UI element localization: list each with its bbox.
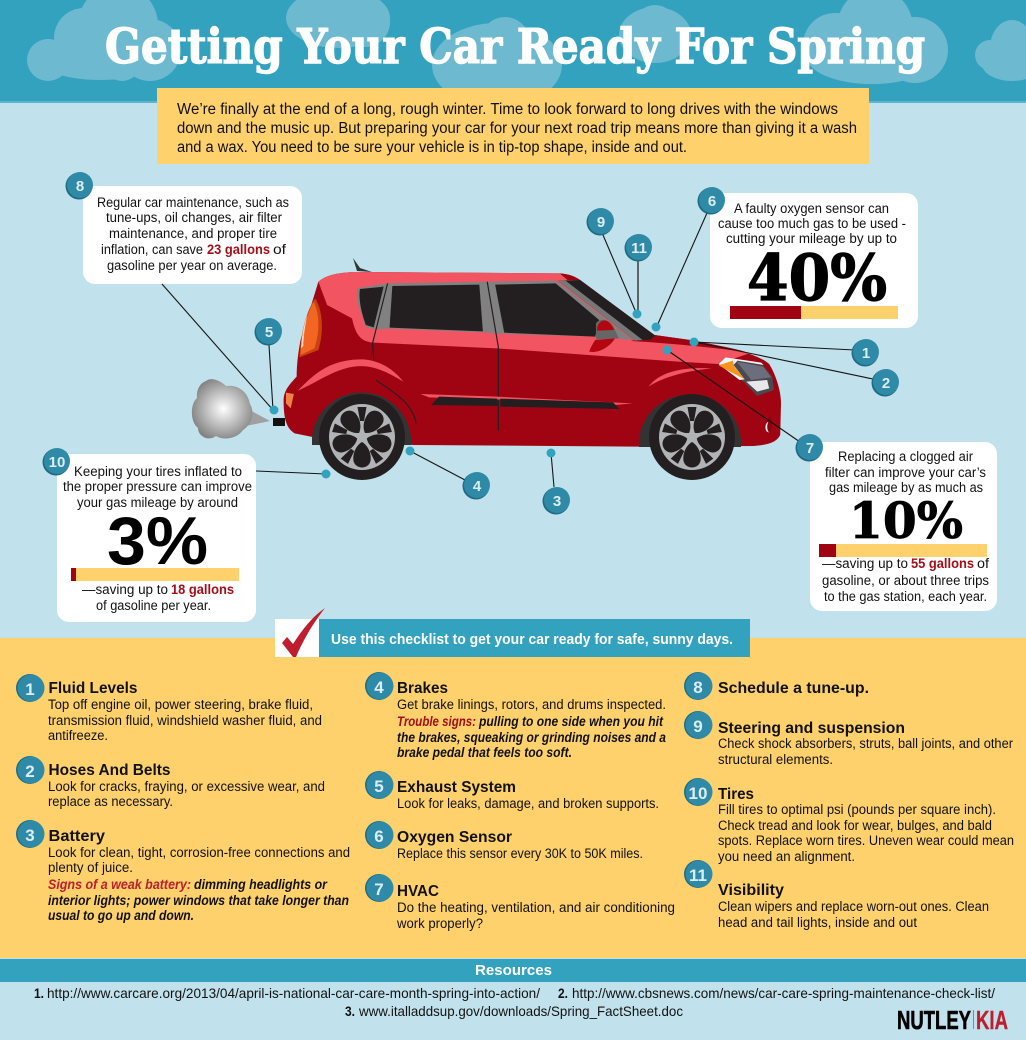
item 2: hoses and belts: replace as necessary. xyxy=(48,794,173,809)
resources band xyxy=(0,959,1026,982)
intro text box: and a wax. You need to be sure your vehicle is in tip-top shape, inside and out. xyxy=(177,139,687,156)
resources links: 2. xyxy=(558,985,568,1001)
callout: regular maintenance: 23 gallons xyxy=(207,242,270,257)
resources links: 3. xyxy=(345,1003,355,1019)
smoke cloud from exhaust xyxy=(192,379,270,438)
checklist panel background xyxy=(0,638,1026,958)
badge 2: 2 xyxy=(882,375,890,392)
badge 7: 7 xyxy=(806,440,814,457)
callout: oxygen sensor 40% xyxy=(710,193,918,328)
item 4: brakes: pulling to one side when you hit xyxy=(478,714,663,729)
item 10: tires: spots. Replace worn tires. Uneven wear could mean xyxy=(718,833,1014,848)
callout: regular maintenance: Regular car maintenance, such as xyxy=(97,195,289,210)
item 4: brakes: 4 xyxy=(374,678,384,697)
headlight xyxy=(719,357,774,396)
callout: tire pressure 3%: —saving up to xyxy=(82,582,168,597)
door seams xyxy=(373,282,498,431)
item 3: battery: interior lights; power windows that take longer than xyxy=(48,893,349,908)
checklist banner: Use this checklist to get your car ready for safe, sunny days. xyxy=(331,631,733,648)
callout: regular maintenance: tune-ups, oil changes, air filter xyxy=(106,210,282,225)
item 1: fluid levels: 1 xyxy=(25,680,35,699)
callout: air filter 10%: of xyxy=(977,556,989,571)
callout: air filter 10%: 55 gallons xyxy=(911,556,974,571)
callout: regular maintenance: inflation, can save xyxy=(101,242,203,257)
item 2: hoses and belts: Hoses And Belts xyxy=(48,762,170,779)
item 1: fluid levels: transmission fluid, windshield washer fluid, and xyxy=(48,713,322,728)
resources links: http://www.carcare.org/2013/04/april-is-national-car-care-month-spring-into-action/ xyxy=(47,985,540,1001)
item 3: battery: plenty of juice. xyxy=(48,860,133,875)
item 10: tires: Tires xyxy=(718,786,754,803)
badge 3 xyxy=(542,487,570,514)
item 9: steering and suspension: structural elements. xyxy=(718,752,833,767)
callout: air filter 10%: gas mileage by as much as xyxy=(829,480,983,495)
item 11: visibility: Visibility xyxy=(718,882,784,899)
title: Getting Your Car Ready For Spring xyxy=(105,19,925,75)
item 3: battery xyxy=(16,820,350,923)
badge 4: 4 xyxy=(473,478,482,495)
windshield xyxy=(558,280,655,341)
wheel arches xyxy=(312,392,741,447)
item 1: fluid levels: Fluid Levels xyxy=(48,680,138,697)
intro text box: down and the music up. But preparing your car for your next road trip means more than giving it a wash xyxy=(177,120,857,137)
item 5: exhaust system: Exhaust System xyxy=(397,779,516,796)
badge 10: 10 xyxy=(49,454,65,471)
side moulding xyxy=(420,394,633,405)
item 6: oxygen sensor: Oxygen Sensor xyxy=(397,829,512,846)
callout: air filter 10%: 10% xyxy=(849,491,963,550)
antenna xyxy=(353,258,372,272)
callout: oxygen sensor 40%: cause too much gas to be used - xyxy=(718,216,906,231)
logo: Nutley Kia: NUTLEY xyxy=(897,1005,971,1035)
resources band: Resources xyxy=(475,962,552,979)
rear wheel xyxy=(319,394,405,480)
item 7: HVAC: 7 xyxy=(374,880,384,899)
item 11: visibility: 11 xyxy=(689,866,707,885)
item 4: brakes: Trouble signs: xyxy=(397,714,476,729)
callout: oxygen sensor 40%: A faulty oxygen sensor can xyxy=(734,201,889,216)
item 3: battery: Battery xyxy=(48,828,105,845)
resources links: http://www.cbsnews.com/news/car-care-spring-maintenance-check-list/ xyxy=(572,985,995,1001)
item 10: tires xyxy=(684,778,1014,864)
badge 2 xyxy=(872,369,899,396)
badge 9: 9 xyxy=(597,214,605,231)
callout: tire pressure 3% xyxy=(57,454,256,622)
item 11: visibility: Clean wipers and replace worn-out ones. Clean xyxy=(718,899,989,914)
intro text box xyxy=(157,88,869,164)
item 2: hoses and belts: Look for cracks, fraying, or excessive wear, and xyxy=(48,779,325,794)
item 7: HVAC: work properly? xyxy=(396,916,483,931)
badge 8 xyxy=(66,172,93,200)
badge 7 xyxy=(796,434,823,462)
item 10: tires: 10 xyxy=(689,784,707,803)
item 7: HVAC: Do the heating, ventilation, and air conditioning xyxy=(397,900,675,915)
badge 9 xyxy=(586,208,614,236)
illustration: red car xyxy=(273,258,781,480)
car body shapes xyxy=(284,272,781,447)
front marker xyxy=(766,415,772,434)
badge 10 xyxy=(42,448,70,476)
callout: oxygen sensor 40%: cutting your mileage by up to xyxy=(726,231,897,246)
badge 5: 5 xyxy=(265,324,273,341)
item 4: brakes xyxy=(365,672,666,760)
wheel arch highlights xyxy=(298,359,403,391)
item 2: hoses and belts xyxy=(16,756,325,809)
item 9: steering and suspension xyxy=(684,711,1013,767)
callout: air filter 10%: filter can improve your car’s xyxy=(825,465,986,480)
item 5: exhaust system xyxy=(365,771,659,811)
callout: air filter 10%: —saving up to xyxy=(822,556,908,571)
item 2: hoses and belts: 2 xyxy=(25,762,35,781)
item 8: schedule a tune-up: Schedule a tune-up. xyxy=(718,680,869,697)
callout: air filter 10%: gasoline, or about three trips xyxy=(822,573,989,588)
windows xyxy=(360,287,384,327)
item 10: tires: Fill tires to optimal psi (pounds per square inch). xyxy=(718,802,996,817)
car pointer dots xyxy=(270,310,698,478)
item 9: steering and suspension: 9 xyxy=(693,717,703,736)
item 3: battery: Look for clean, tight, corrosion-free connections and xyxy=(48,845,350,860)
badge 4 xyxy=(462,472,490,500)
resources links xyxy=(34,985,995,1019)
badge 6: 6 xyxy=(708,193,716,210)
callout: regular maintenance: of xyxy=(273,242,286,257)
item 8: schedule a tune-up: 8 xyxy=(693,678,703,697)
item 10: tires: Check tread and look for wear, bulges, and bald xyxy=(718,818,992,833)
item 6: oxygen sensor: Replace this sensor every 30K to 50K miles. xyxy=(397,846,643,861)
item 4: brakes: Brakes xyxy=(397,680,448,697)
item 3: battery: usual to go up and down. xyxy=(48,908,194,923)
callout: tire pressure 3%: your gas mileage by around xyxy=(77,495,238,510)
badge 8: 8 xyxy=(76,178,84,195)
exhaust pipe xyxy=(273,418,285,426)
header band with clouds xyxy=(0,0,1026,107)
item 5: exhaust system: 5 xyxy=(374,777,384,796)
callout: tire pressure 3%: of gasoline per year. xyxy=(96,598,211,613)
leader lines xyxy=(162,213,873,487)
item 9: steering and suspension: Check shock absorbers, struts, ball joints, and other xyxy=(718,736,1013,751)
item 10: tires: you need an alignment. xyxy=(718,849,855,864)
badge 11 xyxy=(624,234,652,262)
callout: air filter 10%: to the gas station, each year. xyxy=(824,589,987,604)
item 3: battery: dimming headlights or xyxy=(194,877,328,892)
checklist banner xyxy=(275,619,750,657)
item 11: visibility xyxy=(684,860,989,930)
callout: tire pressure 3%: 3% xyxy=(107,503,208,579)
item 3: battery: 3 xyxy=(25,826,35,845)
item 1: fluid levels: antifreeze. xyxy=(48,728,108,743)
callout: tire pressure 3%: Keeping your tires inflated to xyxy=(74,464,242,479)
item 9: steering and suspension: Steering and suspension xyxy=(718,720,905,737)
callout: tire pressure 3%: 18 gallons xyxy=(171,582,234,597)
front wheel xyxy=(649,394,735,480)
badge 3: 3 xyxy=(553,493,561,510)
badge 11: 11 xyxy=(631,240,647,257)
item 3: battery: Signs of a weak battery: xyxy=(48,877,191,892)
item 6: oxygen sensor xyxy=(365,821,643,861)
item 1: fluid levels: Top off engine oil, power steering, brake fluid, xyxy=(48,697,313,712)
intro text box: We’re finally at the end of a long, rough winter. Time to look forward to long drives with the windows xyxy=(177,101,838,118)
callout: air filter 10%: Replacing a clogged air xyxy=(838,449,973,464)
callout: regular maintenance: maintenance, and proper tire xyxy=(109,226,277,241)
resources links: www.italladdsup.gov/downloads/Spring_FactSheet.doc xyxy=(358,1003,683,1019)
callout: air filter 10% xyxy=(810,442,997,611)
item 11: visibility: head and tail lights, inside and out xyxy=(718,915,917,930)
callout: oxygen sensor 40%: 40% xyxy=(747,241,887,316)
badge 1 xyxy=(852,339,879,366)
logo: Nutley Kia: KIA xyxy=(976,1005,1008,1035)
item 1: fluid levels xyxy=(16,674,322,743)
badge 5 xyxy=(254,318,282,346)
item 7: HVAC: HVAC xyxy=(397,883,439,900)
item 4: brakes: brake pedal that feels too soft. xyxy=(397,745,572,760)
badge 1: 1 xyxy=(862,345,870,362)
badge 6 xyxy=(698,187,725,214)
window frame xyxy=(357,281,633,340)
icon: red check mark xyxy=(282,608,325,657)
item 7: HVAC xyxy=(365,874,675,931)
callout: tire pressure 3%: the proper pressure can improve xyxy=(63,479,252,494)
callout: regular maintenance: gasoline per year on average. xyxy=(107,258,277,273)
item 4: brakes: Get brake linings, rotors, and drums inspected. xyxy=(397,697,666,712)
tail light xyxy=(299,298,322,357)
callout: regular maintenance xyxy=(83,186,302,284)
item 4: brakes: the brakes, squeaking or grinding noises and a xyxy=(397,730,666,745)
item 8: schedule a tune-up xyxy=(684,672,869,700)
item 5: exhaust system: Look for leaks, damage, and broken supports. xyxy=(397,796,659,811)
resources links: 1. xyxy=(34,985,44,1001)
item 6: oxygen sensor: 6 xyxy=(374,827,384,846)
mirror xyxy=(596,320,619,339)
